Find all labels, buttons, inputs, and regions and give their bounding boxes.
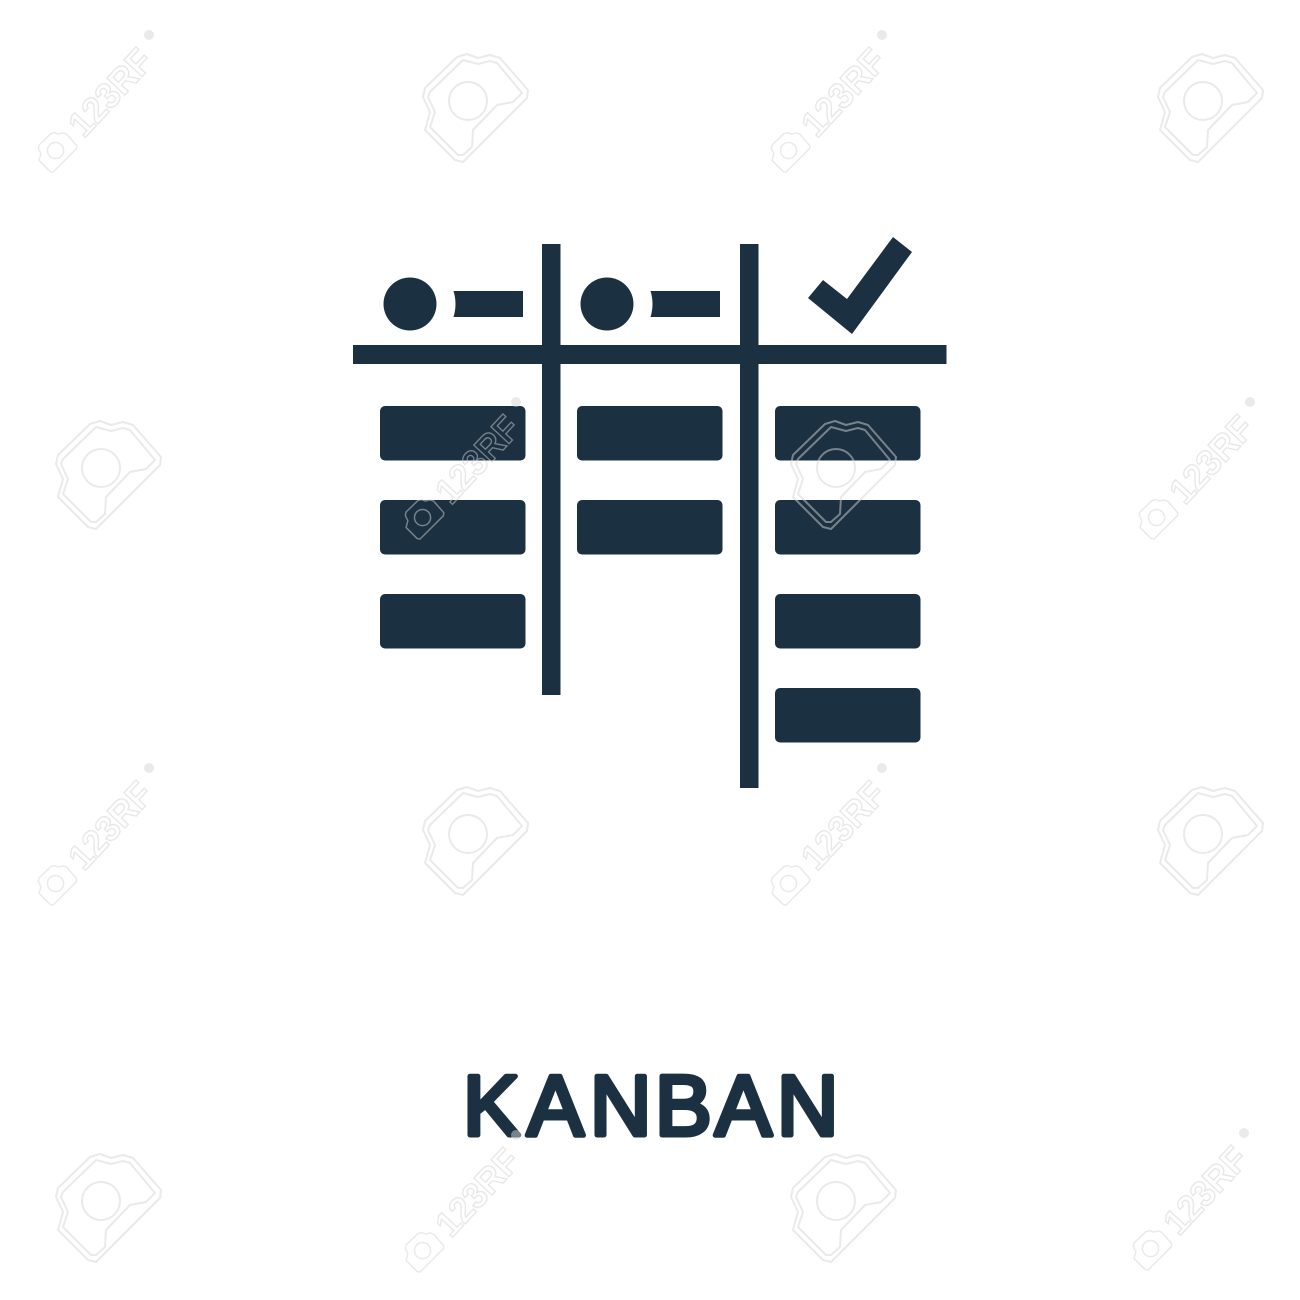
watermark: 123RF logo lower centre: [771, 763, 894, 905]
watermark: 123RF logo bottom right: 123RF: [1155, 1138, 1256, 1242]
watermark: egg 3: [56, 421, 161, 529]
watermark: 123RF logo top centre: 123RF: [793, 40, 894, 144]
watermark: egg 5: [423, 787, 528, 895]
watermark: egg 4: [791, 421, 896, 529]
watermark: egg 2: [1158, 54, 1263, 162]
column 1 header: [384, 278, 523, 330]
watermark: 123RF logo bottom left: 123RF: [427, 1140, 528, 1244]
board grid lines: [353, 244, 946, 788]
column 2 cards: [577, 406, 722, 554]
watermark: 123RF logo top centre: [771, 30, 894, 172]
watermark: 123RF logo middle right: 123RF: [1161, 407, 1262, 511]
watermark: 123RF logo lower left: 123RF: [60, 773, 161, 877]
watermark: egg 1: [423, 54, 528, 162]
title: KANBAN: [463, 1059, 838, 1154]
watermark: egg 8: [791, 1154, 896, 1262]
column 2 header: [580, 278, 720, 330]
watermark: 123RF logo top left: [38, 30, 161, 172]
watermark: 123RF logo lower left: [38, 763, 161, 905]
column 3 cards: [775, 406, 920, 742]
watermark: 123RF logo lower centre: 123RF: [793, 773, 894, 877]
icon: check mark: [808, 237, 912, 334]
icon: kanban board: [353, 237, 946, 788]
watermark: 123RF logo middle right: [1139, 397, 1262, 539]
watermark: 123RF logo bottom right: [1133, 1128, 1256, 1270]
watermark: 123RF logo top left: 123RF: [60, 40, 161, 144]
column 1 cards: [380, 406, 526, 648]
watermark: 123RF logo middle left: [405, 397, 528, 539]
watermark: egg 7: [56, 1154, 161, 1262]
watermark: 123RF logo middle left: 123RF: [427, 407, 528, 511]
watermark: 123RF logo bottom left: [405, 1130, 528, 1272]
watermark: egg 6: [1158, 787, 1263, 895]
